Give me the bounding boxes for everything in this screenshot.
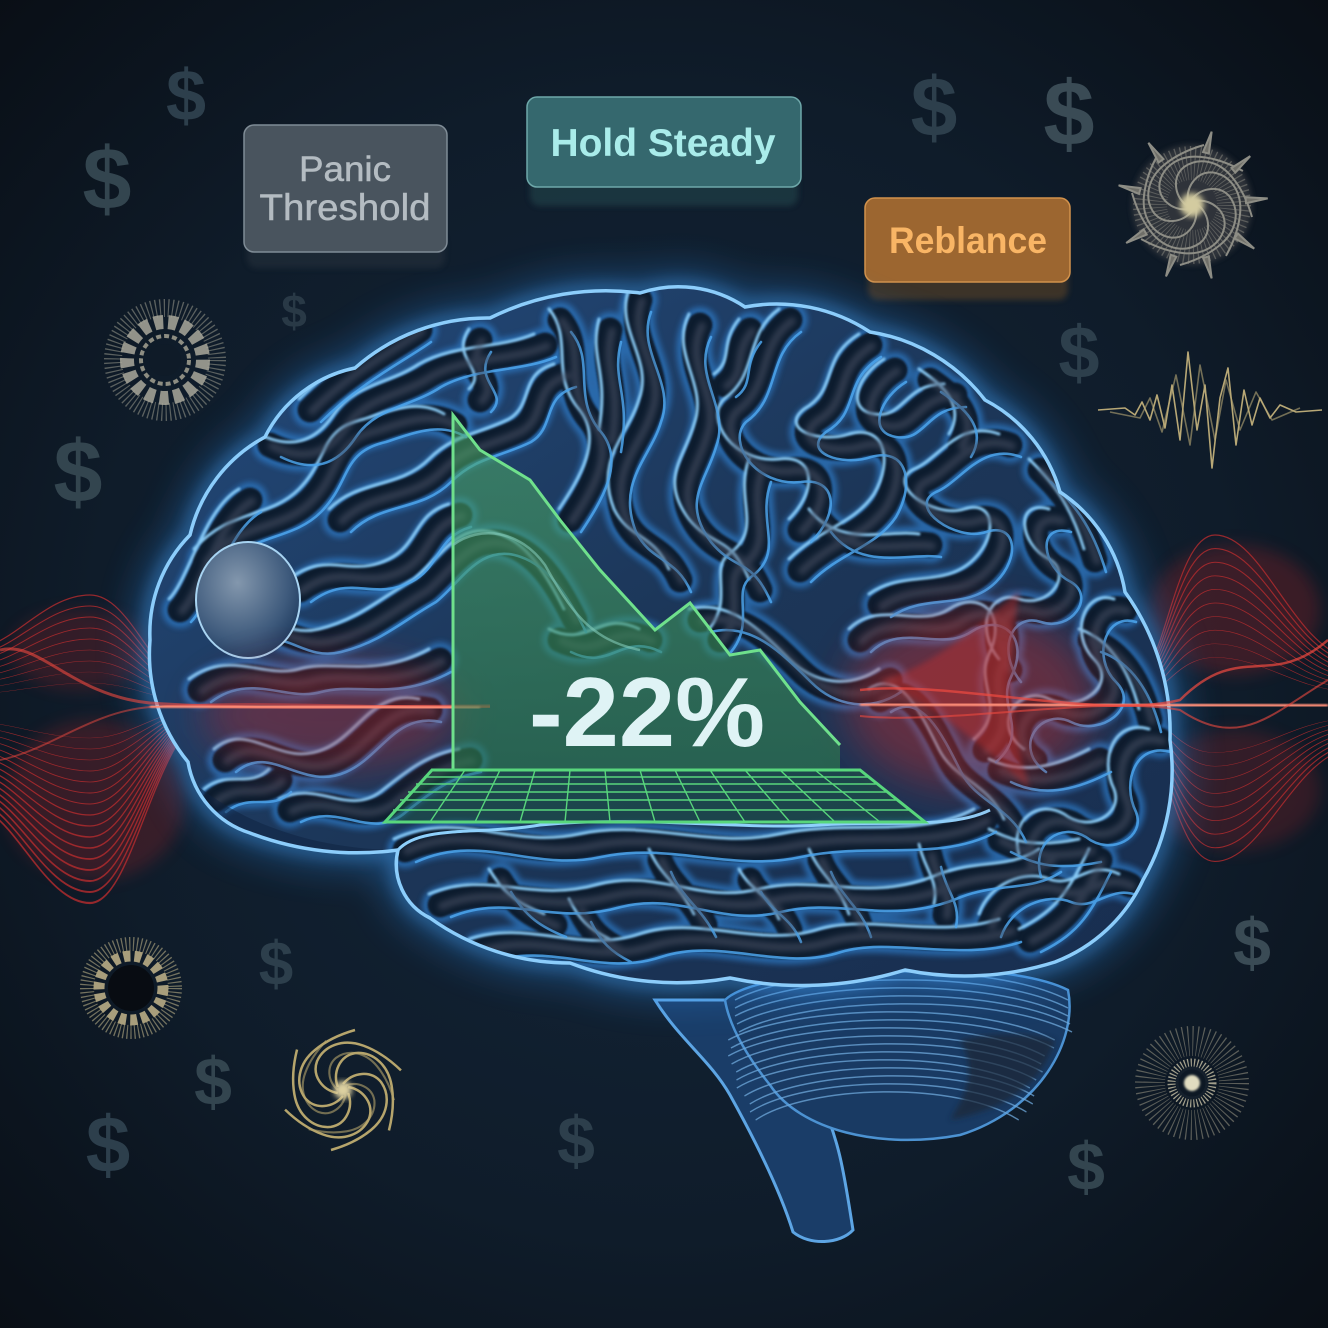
chart area xyxy=(453,415,840,771)
label: Hold Steady: Hold Steady xyxy=(550,122,776,165)
icon: gold spiral xyxy=(269,1022,417,1158)
icon: gold waveform xyxy=(1098,352,1322,468)
dollar sign icons: $ xyxy=(54,422,102,521)
cerebellum xyxy=(725,968,1072,1140)
dollar sign icons: $ xyxy=(1233,905,1271,981)
dollar sign icons xyxy=(54,56,1271,1205)
cortex folds xyxy=(169,289,1171,963)
dollar sign icons: $ xyxy=(194,1044,232,1120)
red haze xyxy=(200,660,460,770)
icon: dotted mandala lower left xyxy=(87,944,175,1032)
dollar sign icons: $ xyxy=(166,56,206,136)
red wave signal line xyxy=(0,640,1328,760)
icon: dotted mandala upper left xyxy=(113,308,217,412)
dollar sign icons: $ xyxy=(259,930,293,999)
label: Panic Threshold xyxy=(244,125,447,268)
brain xyxy=(149,287,1172,1242)
chart grid xyxy=(385,770,925,822)
dark temporal shade xyxy=(198,786,383,851)
dollar sign icons: $ xyxy=(1058,311,1100,394)
dollar sign icons: $ xyxy=(1043,63,1095,165)
dollar sign icons: $ xyxy=(86,1100,130,1189)
label: Panic Threshold: Threshold xyxy=(260,187,430,228)
dollar sign icons: $ xyxy=(911,60,957,154)
label: Panic Threshold: Panic xyxy=(299,150,391,189)
red wave left xyxy=(0,595,200,903)
label: Reblance xyxy=(865,198,1070,300)
green drawdown chart xyxy=(385,415,925,822)
dollar sign icons: $ xyxy=(281,285,307,337)
lobe sphere xyxy=(196,542,300,658)
brain outline xyxy=(149,287,1172,985)
chart line xyxy=(453,415,840,770)
label: Reblance: Reblance xyxy=(889,220,1047,261)
value: -22%: -22% xyxy=(529,657,765,767)
dollar sign icons: $ xyxy=(83,129,131,228)
icon: gray spiral burst xyxy=(1118,131,1268,279)
icon: radial burst xyxy=(1150,1041,1234,1125)
outer glow xyxy=(149,287,1172,985)
label: Hold Steady xyxy=(527,97,801,206)
dollar sign icons: $ xyxy=(557,1103,595,1179)
temporal lobe edge xyxy=(398,810,990,850)
dollar sign icons: $ xyxy=(1067,1129,1105,1205)
brain stem xyxy=(655,1000,853,1242)
brain body xyxy=(149,287,1172,985)
red wave right xyxy=(1130,535,1328,861)
inner hump xyxy=(453,533,640,650)
